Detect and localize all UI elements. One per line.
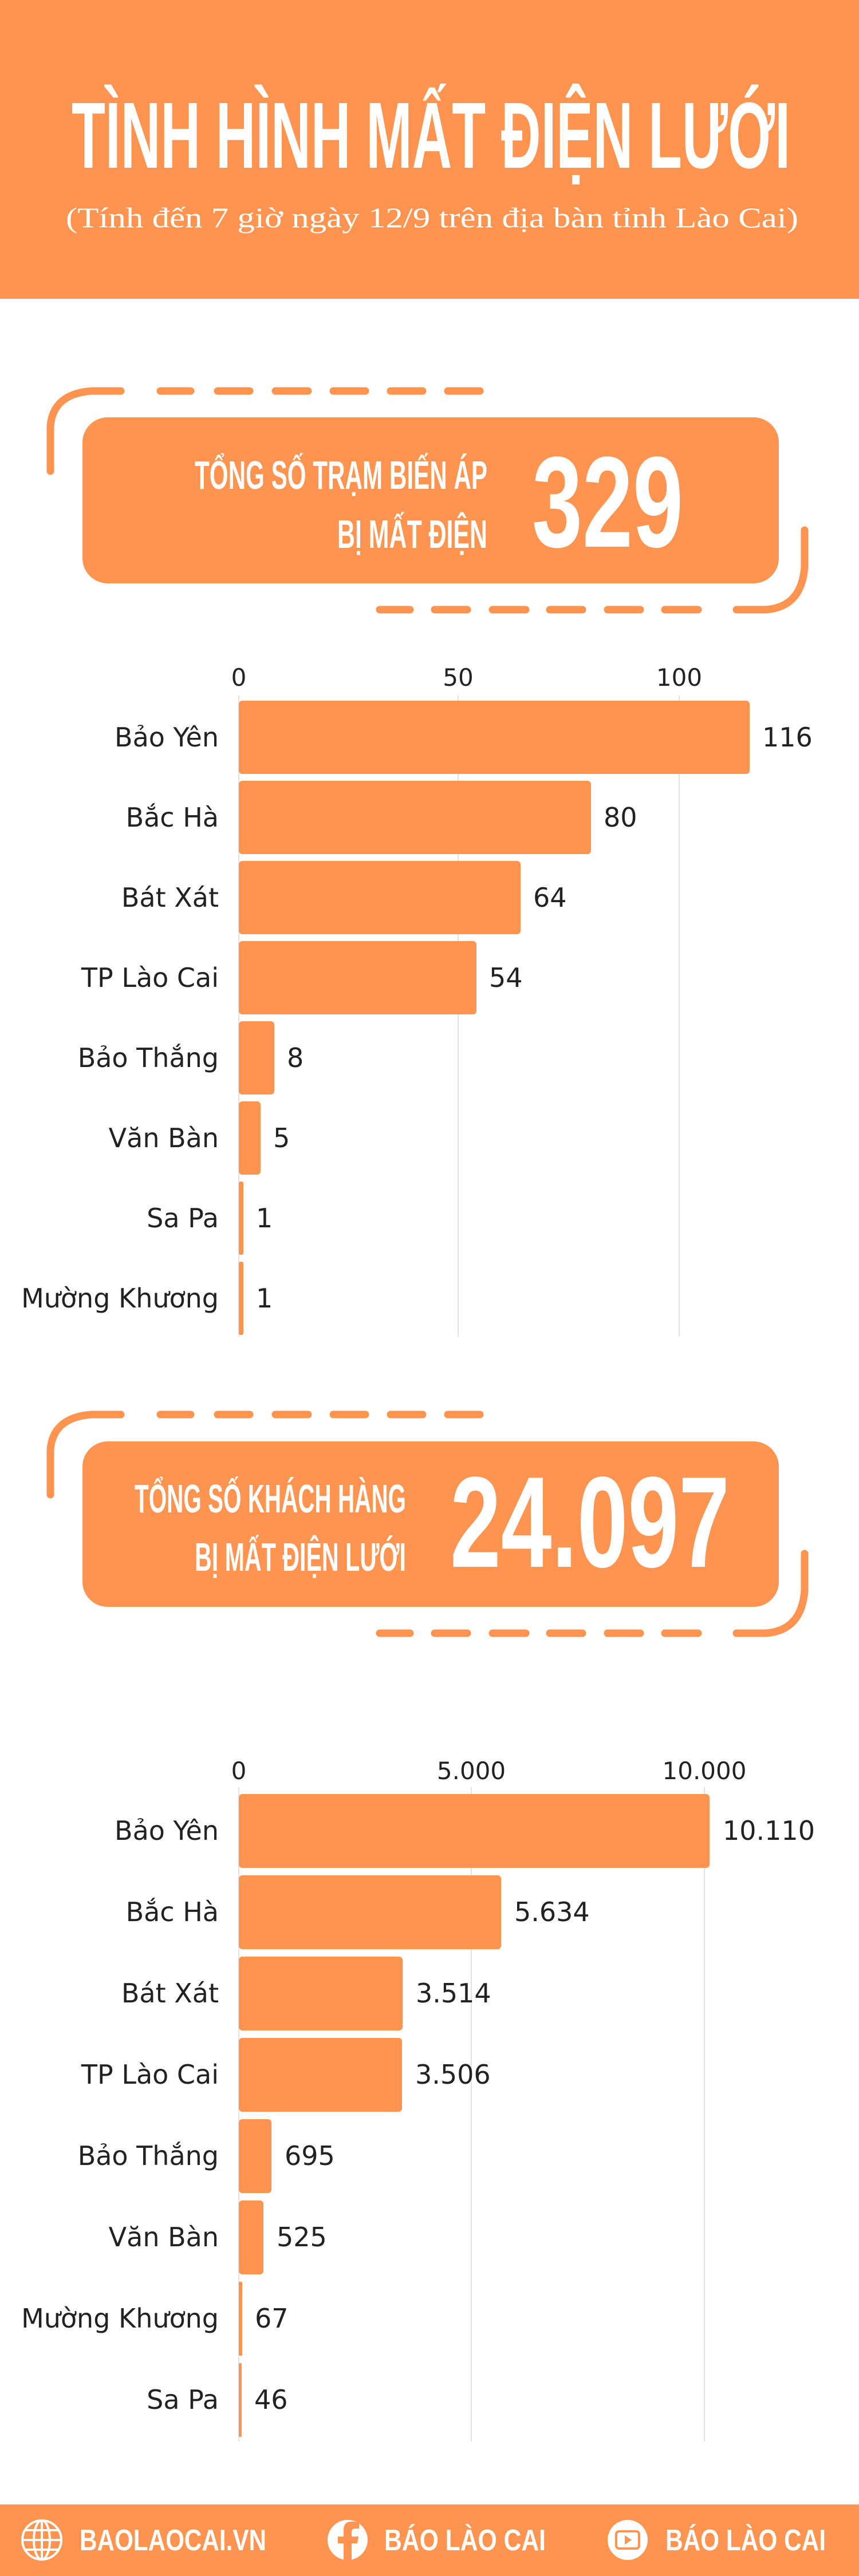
icon: globe	[22, 2520, 61, 2559]
bar chart: customers by district: 10.110	[723, 1815, 815, 1846]
footer	[0, 2504, 859, 2576]
bar chart: stations by district: TP Lào Cai	[81, 962, 219, 993]
bar chart: customers by district: 46	[254, 2384, 288, 2415]
bar chart: stations by district: 64	[533, 882, 567, 913]
big number 329: 329	[532, 429, 683, 574]
bar chart: stations by district: Mường Khương	[21, 1283, 219, 1314]
panel: total customers	[50, 1415, 805, 1633]
bar chart: stations by district: Bảo Thắng	[78, 1042, 219, 1073]
bar chart: customers by district: Sa Pa	[147, 2384, 219, 2415]
bar chart: customers by district: TP Lào Cai	[81, 2059, 219, 2090]
big number 24.097: 24.097	[450, 1449, 730, 1594]
bar chart: customers by district: 5.000	[437, 1757, 506, 1785]
bar chart: customers by district: 3.506	[415, 2059, 491, 2090]
bar chart: stations by district: 116	[762, 722, 813, 753]
label: BỊ MẤT ĐIỆN	[337, 511, 487, 556]
bar chart: stations by district: 50	[443, 663, 474, 692]
facebook text: BÁO LÀO CAI	[384, 2524, 546, 2557]
bar chart: stations by district: 100	[656, 663, 702, 692]
bar chart: customers by district: 67	[255, 2303, 289, 2334]
bar chart: customers by district: Mường Khương	[21, 2303, 219, 2334]
bar chart: stations by district: 80	[604, 802, 637, 833]
bar chart: stations by district: Bát Xát	[121, 882, 219, 913]
bar chart: customers by district: Bảo Thắng	[78, 2140, 219, 2171]
panel: total transformer stations	[50, 391, 805, 610]
label: TỔNG SỐ KHÁCH HÀNG	[135, 1476, 406, 1521]
youtube text: BÁO LÀO CAI	[665, 2524, 826, 2557]
icon: youtube	[608, 2520, 648, 2560]
header band	[0, 0, 859, 299]
label	[135, 1476, 406, 1579]
icon: facebook	[328, 2520, 368, 2560]
bar chart: stations by district: 0	[231, 663, 246, 692]
bar chart: stations by district: 1	[256, 1283, 273, 1314]
bar chart: customers by district: 5.634	[514, 1897, 590, 1927]
website text: BAOLAOCAI.VN	[80, 2524, 266, 2557]
bar chart: customers by district: Văn Bàn	[109, 2222, 219, 2253]
bar chart: stations by district: Bắc Hà	[126, 802, 219, 833]
bar chart: customers by district: 0	[231, 1757, 246, 1785]
bar chart: stations by district: Sa Pa	[147, 1203, 219, 1234]
bar chart: stations by district: 54	[489, 962, 523, 993]
label: TỔNG SỐ TRẠM BIẾN ÁP	[195, 452, 487, 497]
label: BỊ MẤT ĐIỆN LƯỚI	[195, 1534, 406, 1579]
dashed bracket	[50, 1415, 805, 1633]
bar chart: customers by district: Bảo Yên	[115, 1815, 219, 1846]
bar chart: customers by district	[21, 1757, 815, 2441]
label	[195, 452, 487, 556]
bar chart: customers by district: Bắc Hà	[126, 1897, 219, 1927]
dashed bracket top-left	[50, 391, 805, 610]
bar chart: stations by district: Văn Bàn	[109, 1123, 219, 1153]
bar chart: customers by district: 3.514	[416, 1978, 491, 2009]
bar chart: stations by district: Bảo Yên	[115, 722, 219, 753]
bar chart: stations by district	[21, 663, 813, 1337]
bar chart: stations by district: 8	[287, 1042, 304, 1073]
bar chart: customers by district: 695	[285, 2140, 335, 2171]
bar chart: stations by district: 1	[256, 1203, 273, 1234]
bar chart: customers by district: Bát Xát	[121, 1978, 219, 2009]
subtitle: (Tính đến 7 giờ ngày 12/9 trên địa bàn tỉnh Lào Cai)	[66, 202, 798, 234]
bar chart: customers by district: 525	[277, 2222, 327, 2253]
bar chart: stations by district: 5	[273, 1123, 290, 1153]
bar chart: customers by district: 10.000	[663, 1757, 746, 1785]
